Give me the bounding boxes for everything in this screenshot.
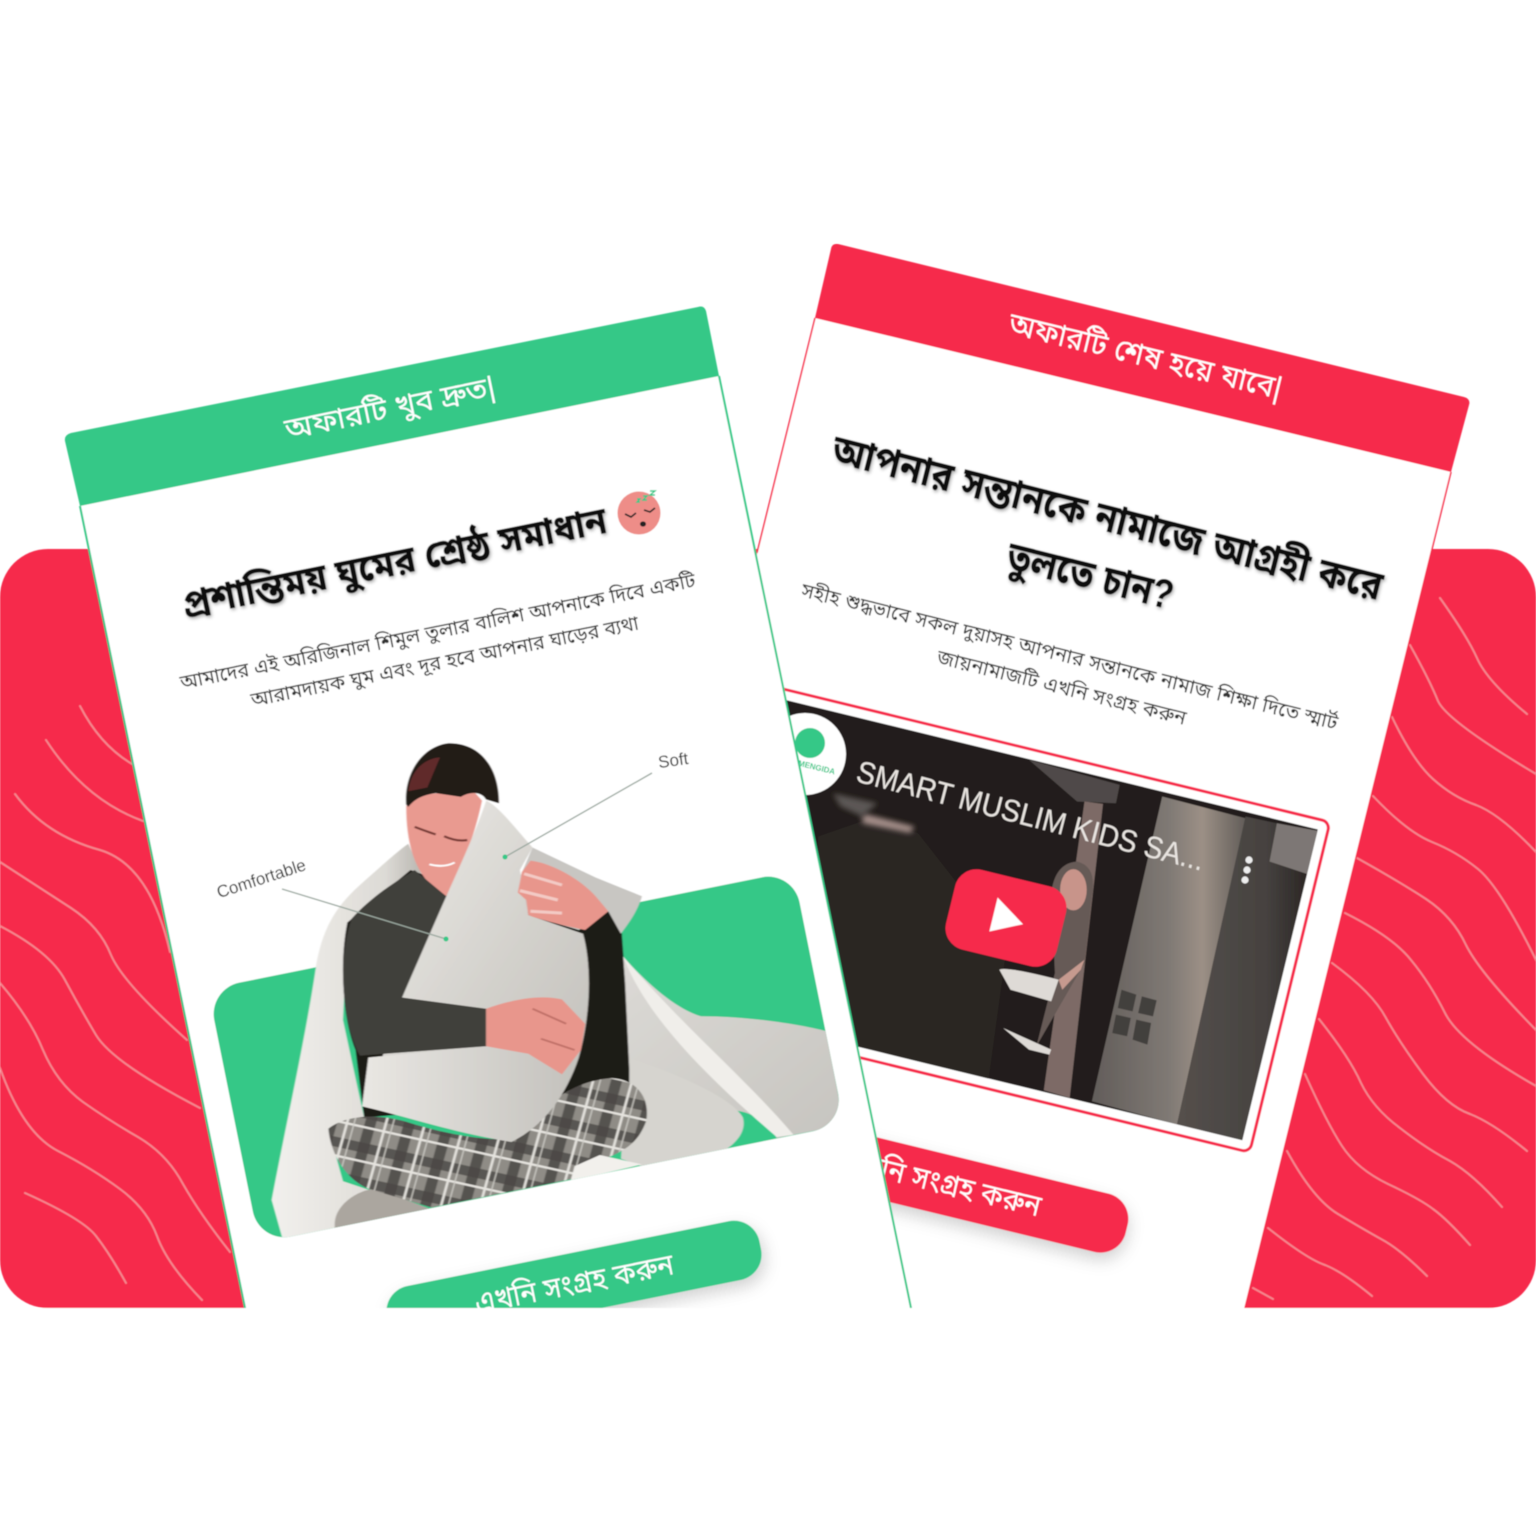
hand lower — [486, 997, 585, 1074]
panel: right card — [756, 244, 1470, 1309]
pillow back corner — [520, 848, 642, 934]
card body — [80, 376, 911, 1308]
video still — [818, 760, 1325, 1143]
callout: comfortable: Comfortable — [214, 855, 308, 902]
wave pattern left — [0, 706, 230, 1300]
heading: প্রশান্তিময় ঘুমের শ্রেষ্ঠ সমাধান — [178, 498, 612, 627]
callout: soft — [502, 749, 690, 860]
channel logo — [789, 712, 847, 796]
card body — [700, 318, 1451, 1308]
channel logo: MENGIDA — [797, 759, 836, 776]
body text: আরামদায়ক ঘুম এবং দূর হবে আপনার ঘাড়ের ব্যথা — [248, 612, 641, 712]
card header — [815, 244, 1469, 472]
blanket lower fold — [335, 1189, 431, 1230]
wave pattern right — [1253, 598, 1536, 1299]
play button — [941, 865, 1071, 971]
heading: তুলতে চান? — [1001, 532, 1178, 621]
subheading: সহীহ শুদ্ধভাবে সকল দুয়াসহ আপনার সন্তানকে নামাজ শিক্ষা দিতে স্মার্ট — [798, 576, 1342, 735]
heading: আপনার সন্তানকে নামাজে আগ্রহী করে — [827, 425, 1389, 609]
video title: SMART MUSLIM KIDS SA... — [853, 754, 1208, 878]
bottom white area — [0, 1308, 1536, 1536]
blanket right — [623, 956, 844, 1138]
video menu dots — [1241, 856, 1253, 884]
header text: অফারটি শেষ হয়ে যাবে| — [1004, 305, 1286, 406]
torso — [343, 870, 629, 1118]
arm — [343, 870, 486, 1056]
video player — [786, 700, 1318, 1141]
button: collect now: এখনি সংগ্রহ করুন — [472, 1246, 677, 1321]
background panel — [0, 549, 1536, 1308]
body text: আমাদের এই অরিজিনাল শিমুল তুলার বালিশ আপনাকে দিবে একটি — [177, 568, 699, 695]
card header — [65, 306, 719, 506]
header text: অফারটি খুব দ্রুত| — [281, 369, 498, 447]
button: collect now — [750, 1110, 1134, 1258]
green image panel — [208, 871, 844, 1243]
pants — [328, 1078, 647, 1208]
callout: comfortable — [214, 855, 448, 942]
hand upper — [518, 861, 608, 930]
photo: man hugging pillow — [272, 743, 844, 1245]
head — [406, 791, 482, 896]
blanket left — [272, 844, 434, 1245]
callout: soft: Soft — [657, 749, 690, 772]
hair — [406, 743, 499, 807]
icon: sleeping face — [618, 491, 660, 534]
panel: left card — [65, 306, 911, 1350]
button: collect now — [386, 1220, 772, 1309]
button: collect now: এখনি সংগ্রহ করুন — [840, 1142, 1045, 1224]
pillow — [362, 801, 589, 1142]
artwork — [0, 244, 1536, 1309]
video frame — [628, 671, 1330, 1152]
subheading: জায়নামাজটি এখনি সংগ্রহ করুন — [934, 644, 1190, 730]
